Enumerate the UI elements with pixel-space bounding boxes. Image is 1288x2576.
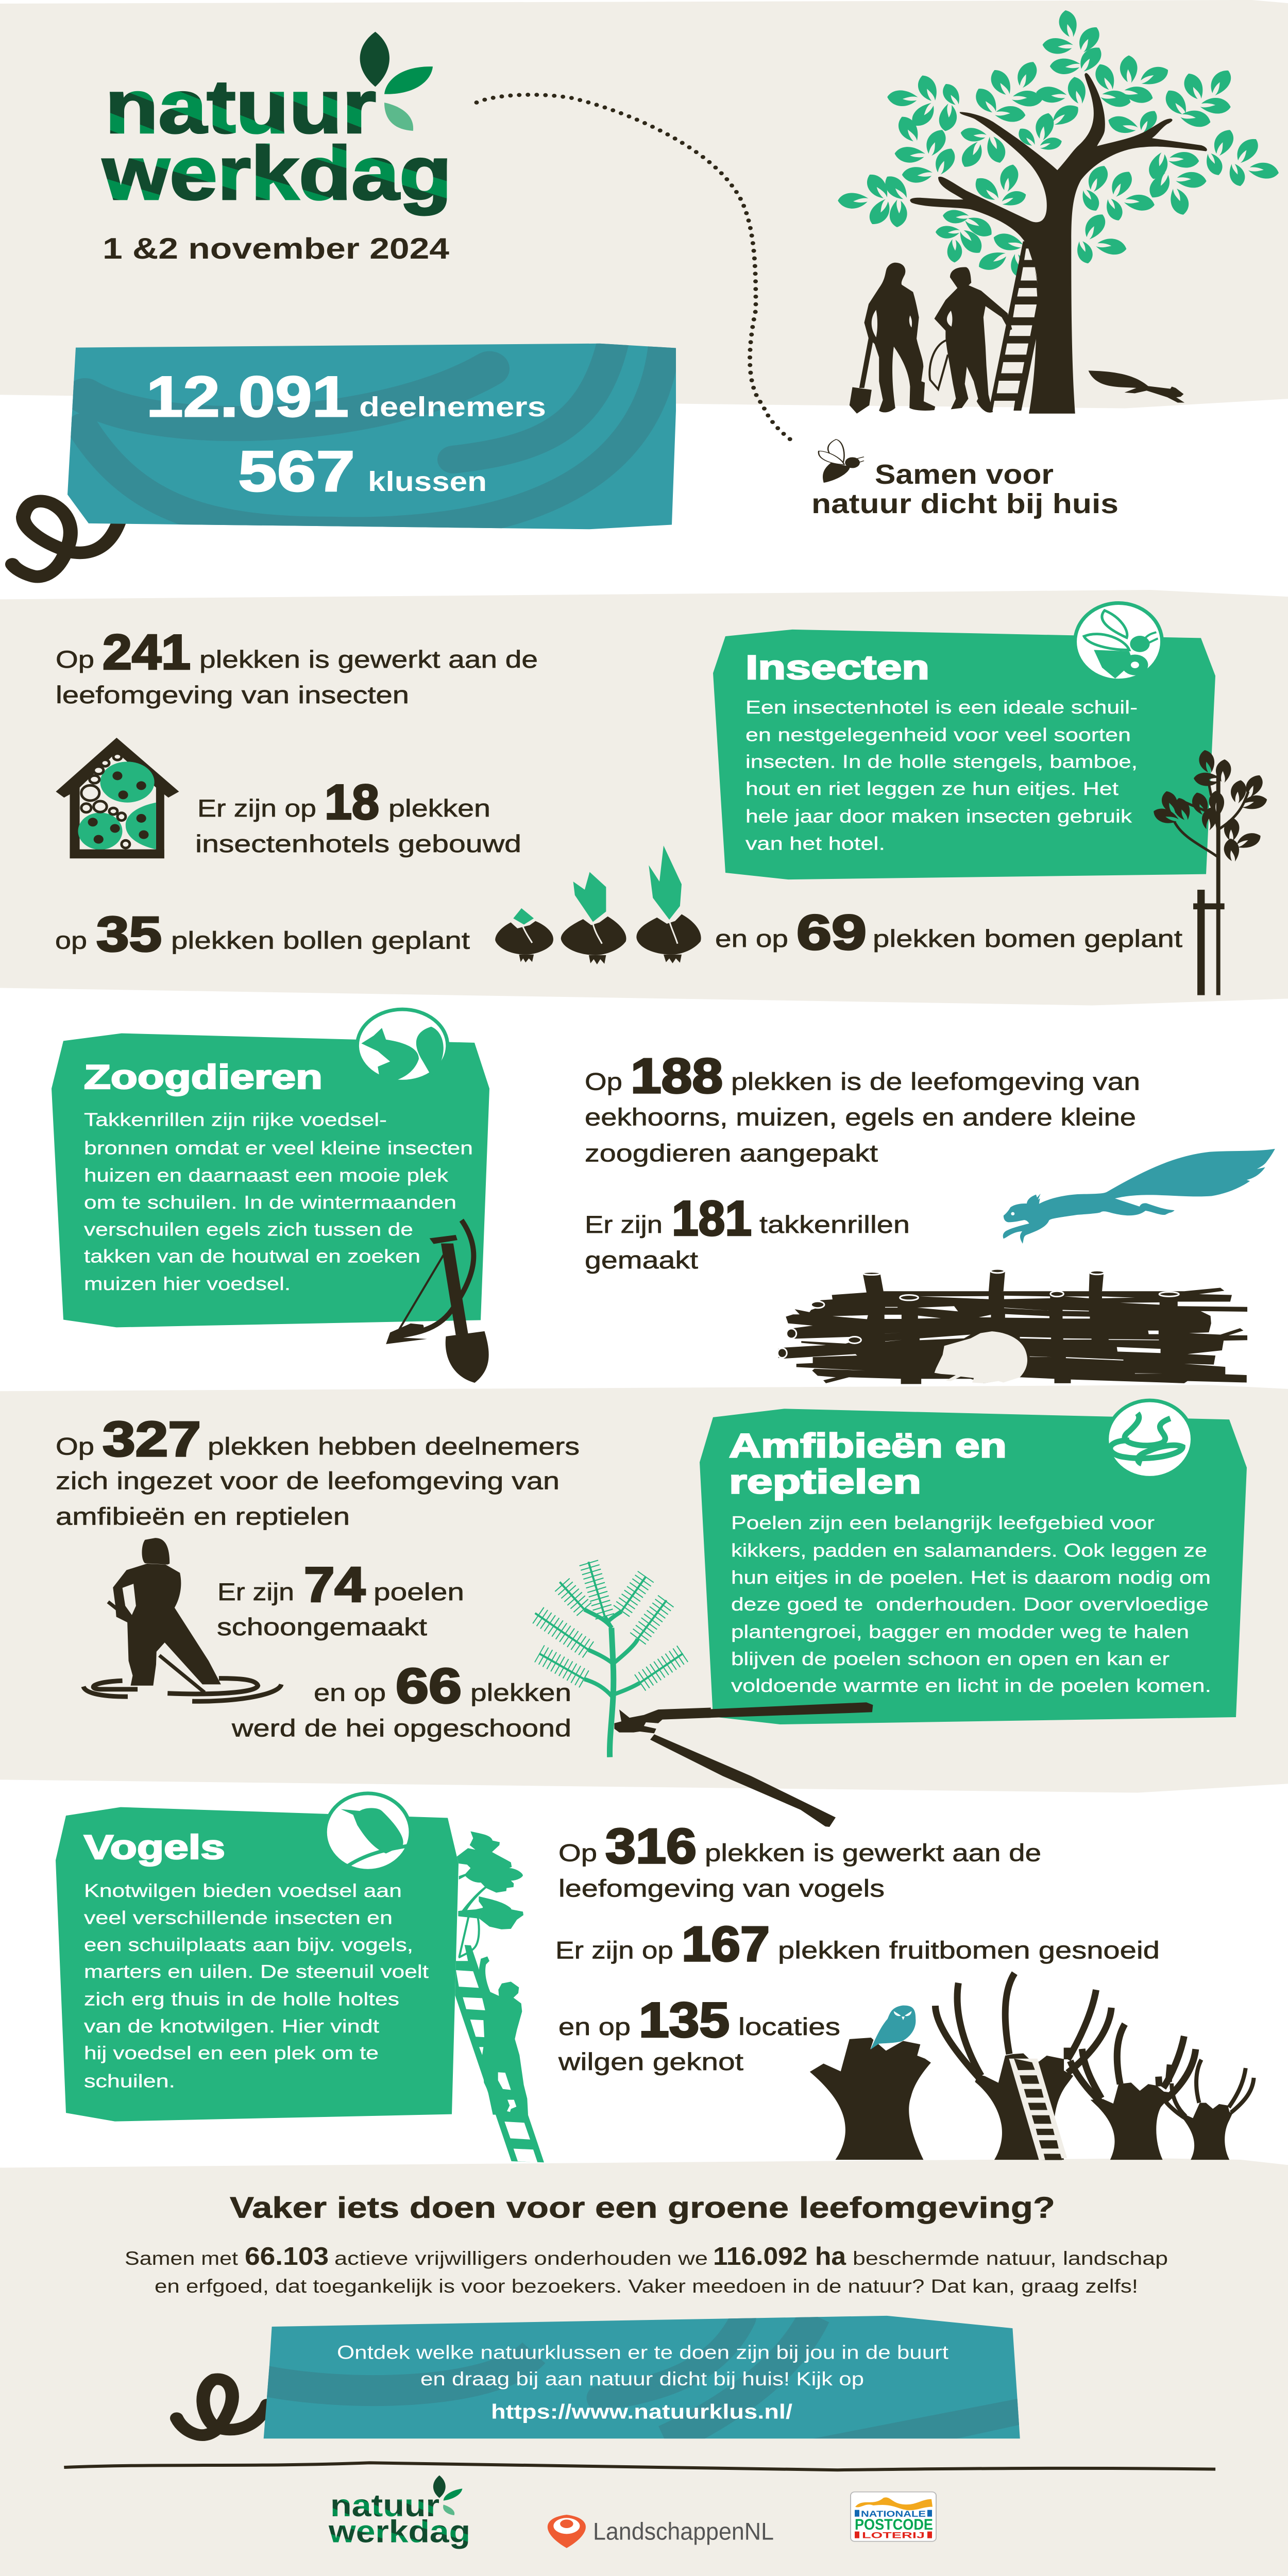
section: mammals stats (585, 1048, 1275, 1384)
owl (870, 2005, 916, 2049)
stat: 327: zich ingezet voor de leefomgeving van (56, 1467, 560, 1495)
stat: 327: plekken hebben deelnemers (208, 1433, 580, 1460)
section: amphibians stats (56, 1411, 580, 1742)
stat: 188: zoogdieren aangepakt (585, 1140, 878, 1167)
stat: 69: en op (715, 925, 788, 952)
stat: 316: leefomgeving van vogels (558, 1874, 885, 1902)
logo: natuurwerkdag (102, 32, 452, 215)
stat: 327: amfibieën en reptielen (56, 1503, 350, 1530)
stat: 66: 66 (396, 1658, 462, 1714)
stat: 167: 167 (682, 1917, 770, 1972)
stat: 18 (195, 774, 521, 857)
stat: 18: Er zijn op (197, 794, 316, 822)
text block: een schuilplaats aan bijv. vogels, (84, 1935, 413, 1955)
stat: 66: en op (314, 1679, 386, 1706)
icon: bee badge (1075, 603, 1162, 681)
heading: Vaker iets doen voor een groene leefomgeving? (230, 2191, 1055, 2224)
small squirrel (1089, 370, 1184, 402)
hedgehog (935, 1331, 1027, 1383)
text block (84, 1881, 429, 2092)
stat: 167: Er zijn op (555, 1937, 673, 1964)
text block: om te schuilen. In de wintermaanden (84, 1192, 456, 1213)
stat: 74: 74 (304, 1557, 365, 1612)
text block: Poelen zijn een belangrijk leefgebied voor (731, 1513, 1155, 1534)
text block: 66.103 (245, 2242, 329, 2270)
stat: 241: 241 (103, 624, 191, 680)
foliage (457, 1832, 523, 1929)
heading: Insecten (745, 648, 929, 687)
squiggle (12, 501, 119, 577)
logo: Nationale Postcode Loterij (851, 2492, 936, 2541)
text block: insecten. In de holle stengels, bamboe, (745, 752, 1138, 772)
text block: en erfgoed, dat toegankelijk is voor bezoekers. Vaker meedoen in de natuur? Dat kan, graag zelfs! (155, 2275, 1138, 2297)
text block: en nestgelegenheid voor veel soorten (745, 725, 1131, 745)
icon: squirrel badge (357, 1009, 448, 1081)
banner: totals (67, 342, 676, 531)
woman with shovel (850, 263, 935, 414)
stat: 181: 181 (672, 1191, 752, 1246)
tagline (811, 459, 1118, 519)
heading: Amfibieën en (729, 1427, 1007, 1465)
stat: 188: Op (585, 1068, 622, 1095)
illustration: teal squirrel (1003, 1149, 1275, 1244)
text block: voldoende warmte en licht in de poelen komen. (731, 1676, 1211, 1697)
stat: 316 (558, 1818, 1041, 1902)
stat: 18: plekken (388, 794, 490, 822)
text block: beschermde natuur, landschap (853, 2247, 1168, 2269)
illustration: pollard willows with owl (810, 1973, 1254, 2160)
text: participants (146, 365, 546, 429)
stat: 66 (231, 1658, 571, 1742)
stat: 188: eekhoorns, muizen, egels en andere kleine (585, 1104, 1136, 1131)
text block (731, 1513, 1211, 1697)
logo: natuurwerkdag: werkdag (102, 131, 452, 215)
text block: marters en uilen. De steenuil voelt (84, 1962, 429, 1982)
illustration: branch pile with hedgehog (777, 1269, 1247, 1384)
stat: 35 (55, 906, 470, 961)
stat: 135: en op (558, 2013, 631, 2040)
text block: Een insectenhotel is een ideale schuil- (745, 697, 1138, 718)
logo: natuurwerkdag: natuur (105, 64, 376, 149)
tagline: Samen voor (875, 459, 1054, 490)
pruning shears (614, 1702, 873, 1827)
illustration: young tree (1150, 750, 1268, 995)
panel: insects info box (713, 603, 1215, 879)
text block: hout en riet leggen ze hun eitjes. Het (745, 778, 1118, 799)
icon: bulbs (495, 845, 701, 964)
stat: 316: 316 (605, 1818, 697, 1873)
text block: blijven de poelen schoon en open en kan er (731, 1649, 1170, 1669)
stat: 74: poelen (374, 1578, 464, 1605)
stat: 69: 69 (796, 905, 867, 960)
text block: schuilen. (84, 2071, 175, 2092)
ladder (1009, 2059, 1067, 2160)
banner: website: https://www.natuurklus.nl/ (491, 2400, 792, 2424)
logo: LandschappenNL: LandschappenNL (593, 2518, 774, 2545)
stat: 181: takkenrillen (759, 1211, 910, 1238)
stat: 188: plekken is de leefomgeving van (731, 1068, 1140, 1095)
heading (729, 1427, 1007, 1501)
text block: Knotwilgen bieden voedsel aan (84, 1881, 402, 1902)
arrow: dotted line (477, 95, 792, 441)
heading: Vogels (84, 1828, 225, 1867)
logo: natuurwerkdag small: natuur (330, 2488, 439, 2523)
icon: bird badge (325, 1793, 411, 1871)
stat: 18: 18 (325, 774, 379, 829)
text block: actieve vrijwilligers onderhouden we (334, 2247, 708, 2269)
stat: 135 (558, 1992, 840, 2075)
panel: insects background (0, 590, 1288, 1005)
logo: natuurwerkdag small: werkdag (328, 2514, 470, 2549)
text: participants: deelnemers (359, 392, 546, 422)
text block: 116.092 ha (713, 2242, 846, 2270)
squiggle (177, 2379, 267, 2435)
illustration: heather branch and pruning shears (535, 1562, 873, 1827)
stat: 35: op (55, 927, 87, 954)
stat: 241: leefomgeving van insecten (56, 681, 409, 708)
stat: 135: locaties (738, 2013, 840, 2040)
text block: zich erg thuis in de holle holtes (84, 1989, 399, 2010)
stat: 241 (56, 624, 538, 708)
logo: LandschappenNL (548, 2515, 774, 2548)
stat: 316: Op (558, 1839, 597, 1867)
stat: 74 (217, 1557, 464, 1640)
text block: kikkers, padden en salamanders. Ook leggen ze (731, 1540, 1207, 1561)
stat: 167: plekken fruitbomen gesnoeid (778, 1937, 1160, 1964)
section: birds stats (555, 1818, 1254, 2160)
stat: 327: 327 (103, 1411, 201, 1466)
stat: 181 (585, 1191, 910, 1274)
panel: amphibians background (0, 1385, 1288, 1793)
text block: bronnen omdat er veel kleine insecten (84, 1138, 473, 1159)
icon: bee (819, 439, 864, 483)
text block: hele jaar door maken insecten gebruik (745, 806, 1132, 827)
panel: footer background (0, 2158, 1288, 2576)
text block: takken van de houtwal en zoeken (84, 1246, 420, 1267)
stat: 327: Op (56, 1433, 94, 1460)
panel: header background (0, 0, 1288, 408)
text block (125, 2242, 1168, 2297)
stat: 181: Er zijn (585, 1211, 663, 1238)
banner: website: Ontdek welke natuurklussen er te doen zijn bij jou in de buurt (337, 2341, 948, 2363)
stat: 188: 188 (631, 1048, 723, 1103)
text block (84, 1110, 473, 1294)
heading: reptielen (729, 1463, 921, 1501)
stat: 316: plekken is gewerkt aan de (705, 1839, 1041, 1867)
illustration: tree with volunteers (837, 9, 1281, 414)
section: call to action (125, 2191, 1168, 2441)
heading: Zoogdieren (84, 1058, 323, 1096)
stat: 241: Op (56, 646, 94, 673)
text block: huizen en daarnaast een mooie plek (84, 1165, 449, 1186)
text block: muizen hier voedsel. (84, 1274, 291, 1294)
banner: website: en draag bij aan natuur dicht bij huis! Kijk op (420, 2368, 864, 2389)
ladder and person (455, 1945, 544, 2162)
text block: deze goed te onderhouden. Door overvloedige (731, 1595, 1209, 1615)
stat: 181: gemaakt (585, 1246, 698, 1274)
stat: 69 (715, 905, 1182, 960)
stat: 66: plekken (470, 1679, 571, 1706)
stat: 135: 135 (639, 1992, 730, 2047)
tagline: natuur dicht bij huis (811, 488, 1118, 519)
stat: 18: insectenhotels gebouwd (195, 830, 521, 857)
man with saw (929, 267, 1012, 413)
panel: birds info box (56, 1793, 459, 2122)
banner: website (246, 2315, 1020, 2441)
illustration: spade and pickaxe (386, 1220, 489, 1383)
stat: 35: plekken bollen geplant (171, 927, 470, 954)
stat: 66: werd de hei opgeschoond (231, 1715, 571, 1742)
text block: van de knotwilgen. Hier vindt (84, 2016, 379, 2037)
text: participants: 12.091 (146, 365, 349, 429)
illustration: person in pond (83, 1538, 281, 1701)
stat: 241: plekken is gewerkt aan de (199, 646, 538, 673)
stat: 135: wilgen geknot (558, 2048, 743, 2075)
text: jobs: 567 (238, 439, 355, 503)
leaves (837, 9, 1281, 277)
panel: amphibians info box (700, 1400, 1247, 1724)
illustration: person on ladder pruning (455, 1832, 544, 2162)
ladder (989, 241, 1039, 412)
stat: 74: schoongemaakt (217, 1613, 427, 1640)
text block: hun eitjes in de poelen. Het is daarom nodig om (731, 1567, 1211, 1588)
logo: natuurwerkdag small (328, 2476, 470, 2549)
text block (745, 697, 1138, 854)
text block: van het hotel. (745, 834, 885, 854)
stat: 35: 35 (96, 906, 162, 961)
text block: verschuilen egels zich tussen de (84, 1219, 413, 1240)
text block: veel verschillende insecten en (84, 1908, 393, 1928)
date: 1 &2 november 2024 (103, 232, 450, 265)
text block: Takkenrillen zijn rijke voedsel- (84, 1110, 387, 1130)
logo: Nationale Postcode Loterij: NATIONALE (861, 2509, 926, 2519)
logo: Nationale Postcode Loterij: LOTERIJ (862, 2531, 925, 2540)
text block: Samen met (125, 2247, 238, 2269)
stat: 69: plekken bomen geplant (873, 925, 1182, 952)
text: jobs: klussen (368, 466, 487, 497)
icon: snake badge (1107, 1400, 1192, 1478)
text: jobs (238, 439, 487, 503)
stat: 167 (555, 1917, 1160, 1972)
stat: 74: Er zijn (217, 1578, 294, 1605)
logo: Nationale Postcode Loterij: POSTCODE (855, 2516, 933, 2533)
tree trunk (910, 73, 1207, 414)
icon: insect hotel (56, 738, 179, 858)
text block: plantengroei, bagger en modder weg te halen (731, 1622, 1189, 1642)
text block: hij voedsel en een plek om te (84, 2043, 379, 2064)
panel: mammals info box (52, 1009, 489, 1327)
stat: 188 (585, 1048, 1140, 1167)
stat: 327 (56, 1411, 580, 1530)
section: insects stats (55, 624, 1182, 964)
